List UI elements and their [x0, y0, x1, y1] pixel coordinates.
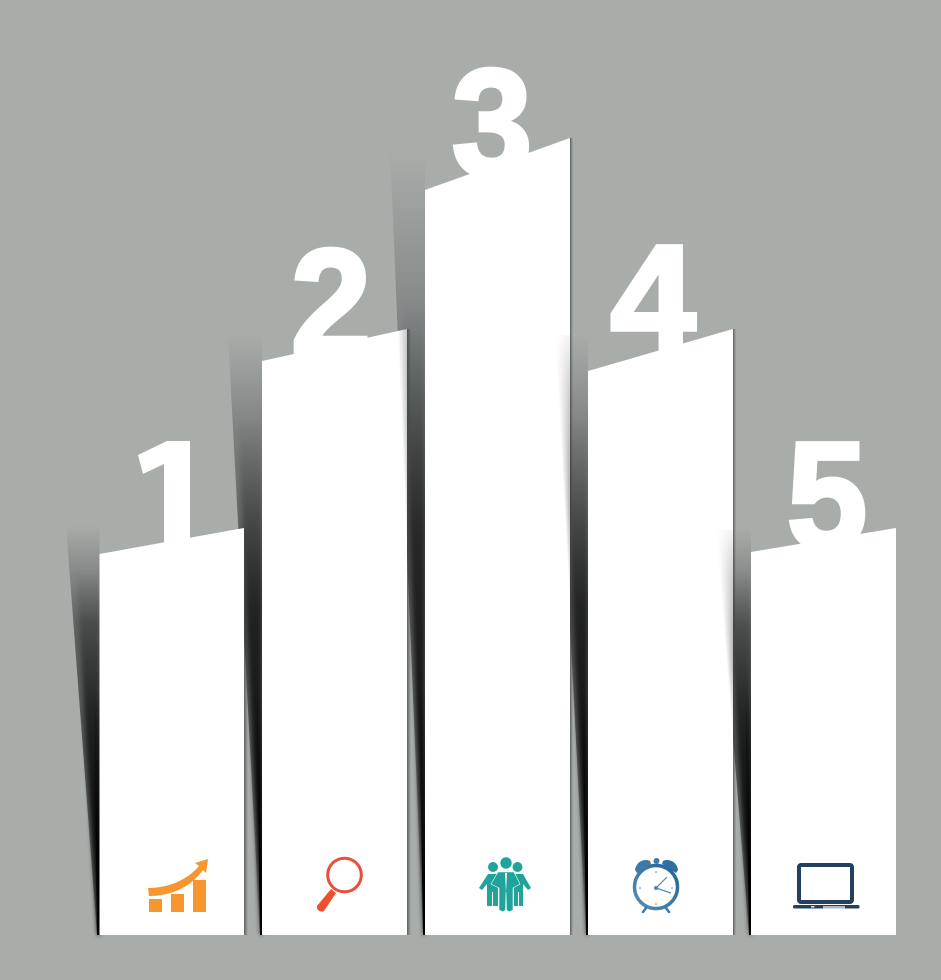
number 4: 4: [610, 215, 696, 384]
number 5: 5: [787, 410, 867, 581]
shadow wedge: bar 4: [555, 335, 588, 935]
cast shade on bar 4: [722, 530, 733, 728]
bar 5: [751, 528, 896, 935]
icon: team of people: [479, 857, 531, 912]
shadow wedge: bar 5: [716, 528, 751, 935]
icon: alarm clock: [634, 858, 678, 912]
shadow wedge: bar 3: [390, 148, 425, 935]
shadow wedge: bar 2: [228, 335, 262, 935]
icon: growth chart: [148, 859, 208, 912]
bar 3: [425, 138, 570, 935]
icon: laptop: [793, 865, 860, 908]
shadow wedge: bar 1: [66, 525, 100, 935]
number 1: [138, 441, 190, 542]
number 2: 2: [291, 217, 371, 388]
icon: magnifying glass: [317, 858, 361, 912]
edge strips beside bars: [244, 138, 736, 935]
cast shade on bar 2: [399, 329, 407, 534]
cast shade on bar 3: [560, 335, 570, 590]
bar 4: [588, 329, 733, 935]
bar 1: [100, 528, 244, 935]
number 3: 3: [452, 37, 532, 208]
bar 2: [262, 329, 407, 935]
number 1: 1: [137, 408, 217, 579]
